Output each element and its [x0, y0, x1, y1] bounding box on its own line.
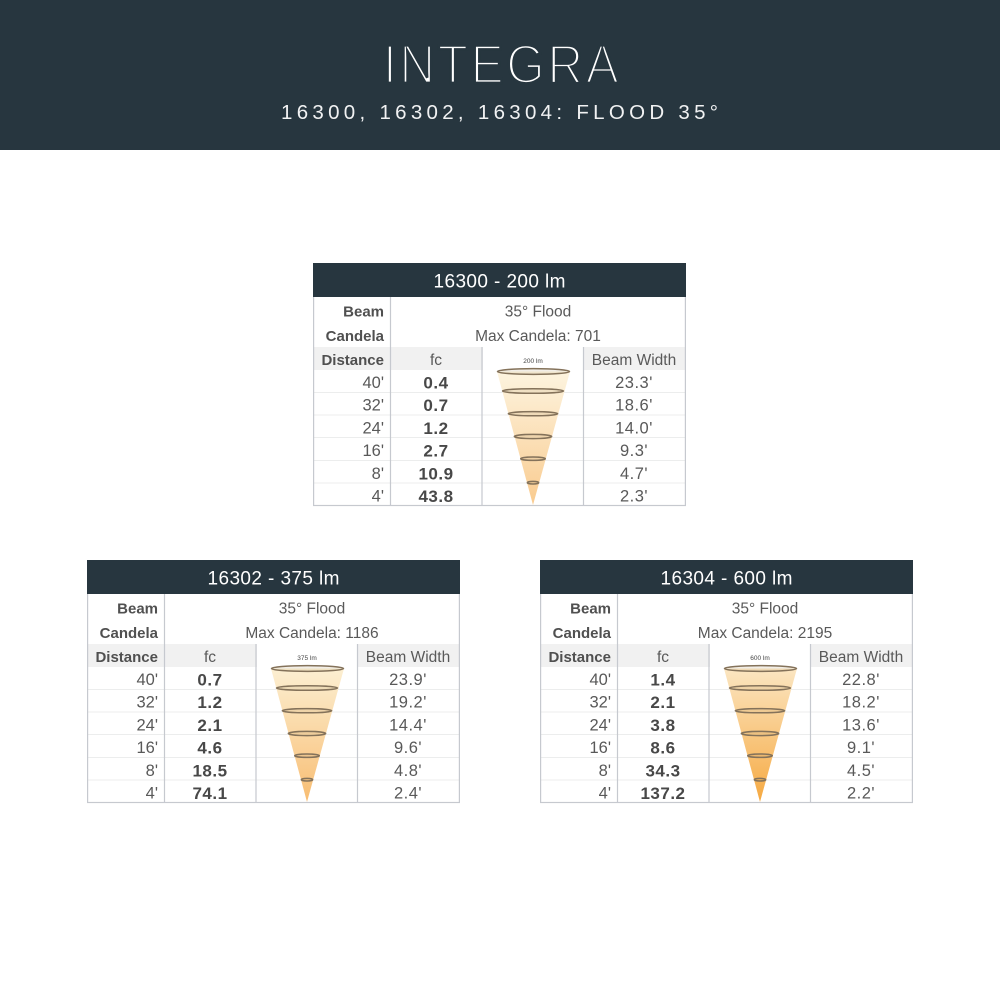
fc column	[418, 352, 454, 506]
beam and candela rows: 35° Flood	[732, 600, 798, 618]
beam width column: 22.8'	[842, 671, 880, 689]
beam width column	[366, 649, 450, 802]
fc column: 137.2	[640, 784, 686, 803]
distance column: Distance	[95, 649, 158, 666]
beam width column: 4.7'	[620, 465, 648, 483]
beam and candela rows: Max Candela: 1186	[245, 625, 379, 642]
panel: 16300 table	[313, 263, 686, 506]
header band	[0, 0, 1000, 150]
distance column: 4'	[146, 784, 158, 802]
fc column: 2.1	[197, 716, 223, 735]
beam width column: Beam Width	[592, 352, 676, 369]
beam width column: 9.1'	[847, 739, 875, 757]
distance column: 16'	[362, 442, 384, 460]
beam cone diagram	[271, 655, 344, 802]
distance column: 8'	[599, 762, 611, 780]
table header: 16300 - 200 lm	[434, 272, 566, 292]
fc column: 2.1	[650, 693, 676, 712]
fc column: fc	[657, 649, 669, 666]
beam width column: Beam Width	[366, 649, 450, 666]
fc column: 2.7	[423, 442, 449, 460]
beam and candela rows: 35° Flood	[505, 304, 571, 320]
beam and candela rows: 35° Flood	[279, 600, 345, 618]
table header	[313, 263, 686, 297]
table header	[87, 560, 460, 594]
beam cone diagram: 375 lm	[297, 655, 317, 662]
fc column: 18.5	[192, 762, 228, 780]
fc column	[640, 649, 686, 803]
distance column: Distance	[321, 352, 384, 369]
fc column: 8.6	[650, 738, 676, 758]
distance column	[321, 352, 384, 506]
distance column: 4'	[372, 488, 384, 506]
distance column: 24'	[136, 716, 158, 734]
title: INTEGRA	[383, 35, 619, 96]
fc column: 3.8	[650, 716, 676, 735]
beam and candela rows: Candela	[326, 328, 385, 345]
beam width column: Beam Width	[819, 649, 903, 666]
table header: 16304 - 600 lm	[660, 568, 792, 590]
distance column: 16'	[136, 739, 158, 757]
beam width column: 2.4'	[394, 784, 422, 802]
distance column	[95, 649, 158, 802]
fc column: 0.4	[423, 374, 449, 392]
beam and candela rows: Candela	[553, 625, 612, 642]
beam and candela rows: Beam	[570, 600, 611, 618]
distance column: Distance	[548, 649, 611, 666]
beam and candela rows: Max Candela: 701	[475, 328, 601, 345]
beam width column	[592, 352, 676, 506]
beam and candela rows	[100, 600, 379, 642]
panel: 16304 table	[540, 560, 913, 803]
beam width column: 23.3'	[615, 374, 653, 392]
distance column: 4'	[599, 784, 611, 802]
beam width column: 13.6'	[842, 716, 880, 734]
distance column: 40'	[136, 671, 158, 689]
fc column: 1.2	[197, 693, 223, 712]
beam and candela rows: Beam	[117, 600, 158, 618]
distance column	[548, 649, 611, 802]
beam cone diagram: 600 lm	[750, 655, 770, 662]
fc column: 74.1	[192, 784, 228, 803]
beam cone diagram	[497, 358, 570, 505]
beam width column: 2.2'	[847, 784, 875, 802]
beam width column: 4.8'	[394, 762, 422, 780]
beam width column: 18.6'	[615, 396, 653, 414]
beam and candela rows: Candela	[100, 625, 159, 642]
distance column: 8'	[372, 465, 384, 483]
distance column: 8'	[146, 762, 158, 780]
beam width column: 9.3'	[620, 442, 648, 460]
fc column: 10.9	[418, 464, 454, 484]
beam width column: 14.4'	[389, 716, 427, 734]
distance column: 32'	[362, 396, 384, 414]
panel: 16302 table	[87, 560, 460, 803]
distance column: 24'	[362, 420, 384, 438]
distance column: 32'	[589, 694, 611, 712]
beam width column: 9.6'	[394, 739, 422, 757]
beam width column: 14.0'	[615, 420, 653, 438]
fc column: fc	[430, 352, 442, 369]
beam cone diagram	[724, 655, 797, 802]
distance column: 16'	[589, 739, 611, 757]
fc column: 34.3	[645, 762, 681, 780]
beam and candela rows: Beam	[343, 304, 384, 320]
table header: 16302 - 375 lm	[208, 568, 340, 590]
subtitle: 16300, 16302, 16304: FLOOD 35°	[281, 101, 718, 124]
beam width column: 23.9'	[389, 671, 427, 689]
table header	[540, 560, 913, 594]
beam and candela rows	[553, 600, 832, 642]
distance column: 32'	[136, 694, 158, 712]
fc column: 4.6	[197, 738, 223, 758]
fc column: 43.8	[418, 487, 454, 506]
beam width column: 2.3'	[620, 488, 648, 506]
distance column: 40'	[362, 374, 384, 392]
fc column: 0.7	[423, 396, 449, 415]
beam width column: 4.5'	[847, 762, 875, 780]
fc column: 1.2	[423, 419, 449, 438]
fc column: fc	[204, 649, 216, 666]
beam width column: 19.2'	[389, 694, 427, 712]
beam and candela rows: Max Candela: 2195	[698, 625, 832, 642]
distance column: 40'	[589, 671, 611, 689]
beam width column	[819, 649, 903, 802]
fc column: 1.4	[650, 670, 676, 690]
beam and candela rows	[326, 304, 601, 345]
distance column: 24'	[589, 716, 611, 734]
fc column: 0.7	[197, 670, 223, 690]
fc column	[192, 649, 228, 803]
beam width column: 18.2'	[842, 694, 880, 712]
beam cone diagram: 200 lm	[523, 358, 543, 365]
